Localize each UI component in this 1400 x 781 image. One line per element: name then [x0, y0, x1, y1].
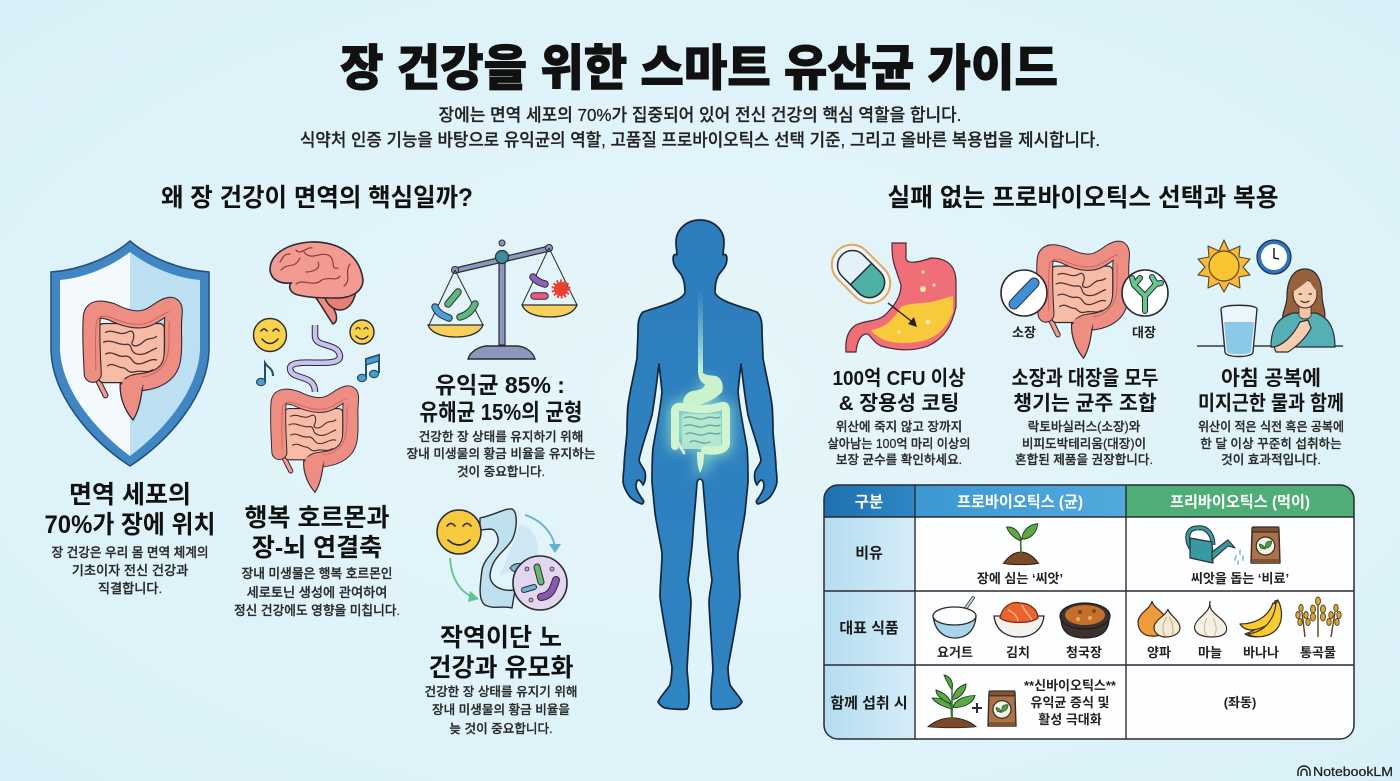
label: whole grain: 통곡물	[1300, 645, 1336, 660]
heading: 행복 호르몬과	[245, 504, 389, 532]
row labels	[830, 545, 908, 712]
arrow: green cycle	[450, 558, 479, 602]
icon: water glass	[1221, 305, 1257, 356]
icon: watering can	[1188, 528, 1243, 564]
text block: 정신 건강에도 영향을 미칩니다.	[234, 603, 400, 618]
text block	[234, 566, 400, 618]
heading: probiotics selection: 실패 없는 프로바이오틱스 선택과 복용	[888, 184, 1278, 212]
text block: 비피도박테리움(대장)이	[1022, 437, 1146, 451]
synbiotics text	[1024, 678, 1117, 727]
column headers: 프리바이오틱스 (먹이)	[1170, 493, 1310, 511]
icon: onion	[1138, 601, 1180, 637]
panel: 10 billion CFU	[824, 237, 970, 467]
heading	[1198, 367, 1344, 415]
row labels: 비유	[855, 545, 883, 562]
icon: brain	[270, 242, 363, 324]
heading: 장-뇌 연결축	[252, 534, 382, 562]
stomach and intestine	[675, 370, 726, 473]
same as left: (좌동)	[1224, 695, 1256, 710]
text block: 위산이 적은 식전 혹은 공복에	[1198, 419, 1344, 434]
icon: whole grain	[1296, 597, 1341, 637]
heading: 소장과 대장을 모두	[1012, 367, 1158, 390]
arrow: blue cycle	[525, 515, 561, 553]
icon: smile, gut and microbes	[437, 509, 567, 610]
icon: garlic	[1195, 601, 1227, 637]
heading: 유해균 15%의 균형	[420, 399, 582, 425]
panel: strain combination	[1001, 249, 1168, 467]
text block: 건강한 장 상태를 유지하기 위해	[419, 430, 583, 444]
icon: capsule and stomach	[824, 237, 956, 352]
heading	[44, 481, 216, 539]
panel: gut-brain axis	[234, 242, 400, 618]
icon: woman	[1271, 269, 1335, 352]
label: cheonggukjang: 청국장	[1066, 645, 1102, 660]
text block: 장내 미생물의 황금 비율을 유지하는	[406, 447, 596, 461]
text block: 락토바실러스(소장)와	[1028, 420, 1141, 434]
heading: 면역 세포의	[69, 481, 191, 509]
heading: 유익균 85% :	[435, 372, 565, 398]
text block: 늦 것이 중요합니다.	[449, 721, 553, 736]
column headers	[855, 493, 1310, 511]
heading: & 장용성 코팅	[839, 392, 959, 415]
NotebookLM logo: NotebookLM	[1313, 765, 1393, 779]
text block	[424, 685, 578, 736]
icon: cheonggukjang	[1060, 603, 1110, 638]
heading: 아침 공복에	[1221, 367, 1321, 390]
panel: balance	[406, 240, 596, 479]
text block: 세로토닌 생성에 관여하여	[247, 585, 387, 600]
heading	[832, 367, 966, 415]
glow	[675, 384, 726, 468]
subtitle: 장에는 면역 세포의 70%가 집중되어 있어 전신 건강의 핵심 역할을 합니다.	[438, 105, 962, 125]
text block: 직결합니다.	[98, 581, 162, 596]
synbiotics text: 활성 극대화	[1038, 712, 1102, 727]
text block: 살아남는 100억 마리 이상의	[828, 437, 970, 451]
heading: 챙기는 균주 조합	[1013, 392, 1157, 415]
text block: 건강한 장 상태를 유지기 위해	[424, 685, 578, 699]
label: onion: 양파	[1147, 645, 1171, 660]
title: 장 건강을 위한 스마트 유산균 가이드	[340, 42, 1058, 96]
text block: 혼합된 제품을 권장합니다.	[1015, 452, 1153, 467]
icon: intestine with strains	[1001, 249, 1168, 358]
label: large intestine: 대장	[1132, 325, 1156, 340]
panel: morning intake	[1197, 240, 1344, 467]
label: seed: 장에 심는 ‘씨앗’	[977, 571, 1063, 586]
icon: seedling	[1004, 524, 1038, 565]
row labels: 함께 섭취 시	[830, 695, 908, 712]
text block: 장내 미생물의 황금 비율을	[432, 703, 570, 717]
column headers: 구분	[855, 493, 883, 511]
label: fertilizer: 씨앗을 돕는 ‘비료’	[1191, 571, 1289, 586]
label: garlic: 마늘	[1198, 645, 1222, 660]
esophagus	[698, 288, 703, 372]
heading: 미지근한 물과 함께	[1198, 392, 1344, 415]
heading: why gut health: 왜 장 건강이 면역의 핵심일까?	[161, 184, 473, 212]
text block: 보장 균수를 확인하세요.	[836, 453, 962, 467]
text block	[1198, 419, 1344, 467]
synbiotics text: **신바이오틱스**	[1024, 678, 1117, 693]
row labels: 대표 식품	[839, 620, 899, 637]
icon: music notes	[256, 355, 379, 386]
icon: table line	[1197, 345, 1343, 347]
label: yogurt: 요거트	[937, 645, 973, 660]
label: kimchi: 김치	[1006, 645, 1030, 660]
text block: 위산에 죽지 않고 장까지	[836, 420, 962, 434]
text block: 장내 미생물은 행복 호르몬인	[242, 566, 392, 581]
icon: gut-brain nerve	[290, 325, 340, 392]
subtitle: 식약처 인증 기능을 바탕으로 유익균의 역할, 고품질 프로바이오틱스 선택 기준, 그리고 올바른 복용법을 제시합니다.	[300, 130, 1100, 150]
text block: 것이 효과적입니다.	[1221, 453, 1321, 467]
icon: sun	[1198, 240, 1250, 292]
panel: modulation	[424, 509, 578, 736]
text block: 장 건강은 우리 몸 면역 체계의	[52, 545, 208, 560]
text block: 한 달 이상 꾸준히 섭취하는	[1200, 437, 1342, 451]
label: small intestine: 소장	[1012, 325, 1036, 340]
icon: shield with intestine	[51, 241, 209, 466]
synbiotics text: 유익균 증식 및	[1031, 695, 1110, 710]
icon: sprout plus fertilizer	[928, 675, 1016, 728]
heading	[429, 624, 573, 682]
subtitle	[300, 105, 1100, 150]
text block	[52, 545, 208, 596]
icon: clock	[1257, 240, 1291, 274]
icon: banana	[1240, 600, 1281, 637]
silhouette	[623, 220, 777, 709]
heading: 작역이단 노	[440, 624, 562, 652]
text block	[406, 430, 596, 479]
heading	[420, 372, 582, 425]
heading: 70%가 장에 위치	[44, 511, 216, 539]
icon: fertilizer bag	[1251, 527, 1280, 563]
text block	[828, 420, 970, 467]
text block: 기초이자 전신 건강과	[72, 563, 188, 578]
icon: balance scale	[428, 240, 577, 359]
heading: 건강과 유모화	[429, 654, 573, 682]
heading	[245, 504, 389, 562]
heading: 100억 CFU 이상	[832, 367, 966, 390]
icon: yogurt	[933, 598, 976, 638]
text block: 것이 중요합니다.	[457, 464, 545, 479]
panel: immune cells	[44, 241, 216, 596]
text block	[1015, 420, 1153, 467]
comparison table	[824, 485, 1354, 739]
table cells	[824, 485, 1354, 739]
label: banana: 바나나	[1243, 645, 1279, 660]
icon: smiley faces	[254, 318, 374, 352]
column headers: 프로바이오틱스 (균)	[957, 493, 1083, 511]
icon: kimchi	[994, 603, 1044, 637]
human body with glowing gut	[623, 220, 777, 709]
icon: intestine	[278, 393, 351, 492]
heading	[1012, 367, 1158, 415]
